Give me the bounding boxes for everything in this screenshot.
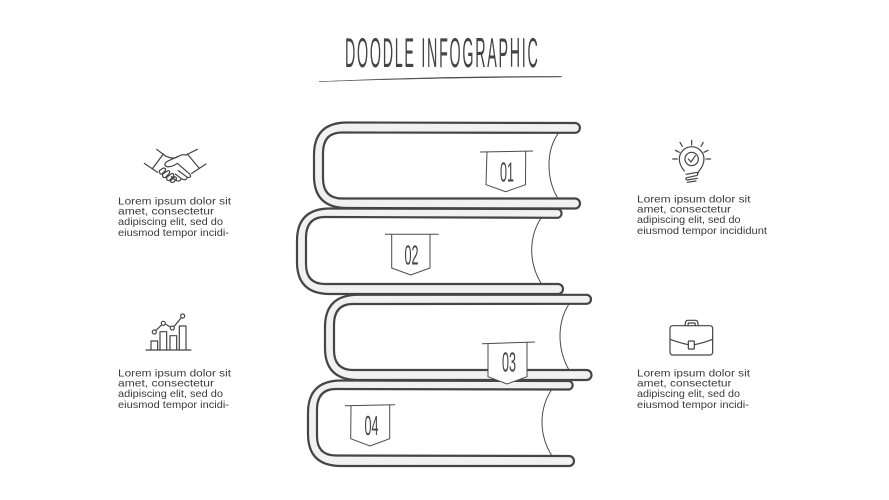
icon: handshake <box>144 149 206 182</box>
book 2 <box>297 208 563 294</box>
text block: bottom left: eiusmod tempor incidi- <box>118 399 230 411</box>
icon: lightbulb <box>673 140 711 182</box>
bookmark 03 <box>482 342 535 384</box>
text block: top right <box>637 194 767 237</box>
book 4 <box>308 380 574 466</box>
bookmark 01 <box>480 151 533 192</box>
bookmark 01: 01 <box>500 157 514 188</box>
text block: top right: eiusmod tempor incididunt <box>637 225 767 237</box>
text block: top left: amet, consectetur <box>118 206 215 218</box>
text block: bottom right: eiusmod tempor incidi- <box>637 399 750 411</box>
text block: bottom left <box>118 368 231 411</box>
text block: top left <box>118 196 231 239</box>
text block: bottom left: adipiscing elit, sed do <box>118 388 223 400</box>
text block: top left: Lorem ipsum dolor sit <box>118 196 231 208</box>
text block: bottom right: adipiscing elit, sed do <box>637 388 740 400</box>
text block: top left: eiusmod tempor incidi- <box>118 227 230 239</box>
text block: top right: adipiscing elit, sed do <box>637 214 741 226</box>
text block: bottom right <box>637 368 750 411</box>
bookmark 03: 03 <box>502 347 516 378</box>
text block: bottom left: Lorem ipsum dolor sit <box>118 368 231 380</box>
text block: bottom left: amet, consectetur <box>118 378 215 390</box>
text block: bottom right: amet, consectetur <box>637 378 732 390</box>
bookmark 02 <box>385 234 439 275</box>
title: DOODLE INFOGRAPHIC <box>345 30 538 76</box>
text block: bottom right: Lorem ipsum dolor sit <box>637 368 750 380</box>
text block: top left: adipiscing elit, sed do <box>118 216 223 228</box>
bookmark 02: 02 <box>404 240 418 270</box>
book 3 <box>325 295 592 380</box>
bookmark 04 <box>345 405 395 446</box>
icon: briefcase <box>670 320 713 355</box>
book 1 <box>314 122 580 208</box>
title underline <box>319 76 562 82</box>
text block: top right: Lorem ipsum dolor sit <box>637 194 751 206</box>
text block: top right: amet, consectetur <box>637 204 732 216</box>
icon: bar chart with trend line <box>146 314 191 350</box>
bookmark 04: 04 <box>364 410 378 441</box>
